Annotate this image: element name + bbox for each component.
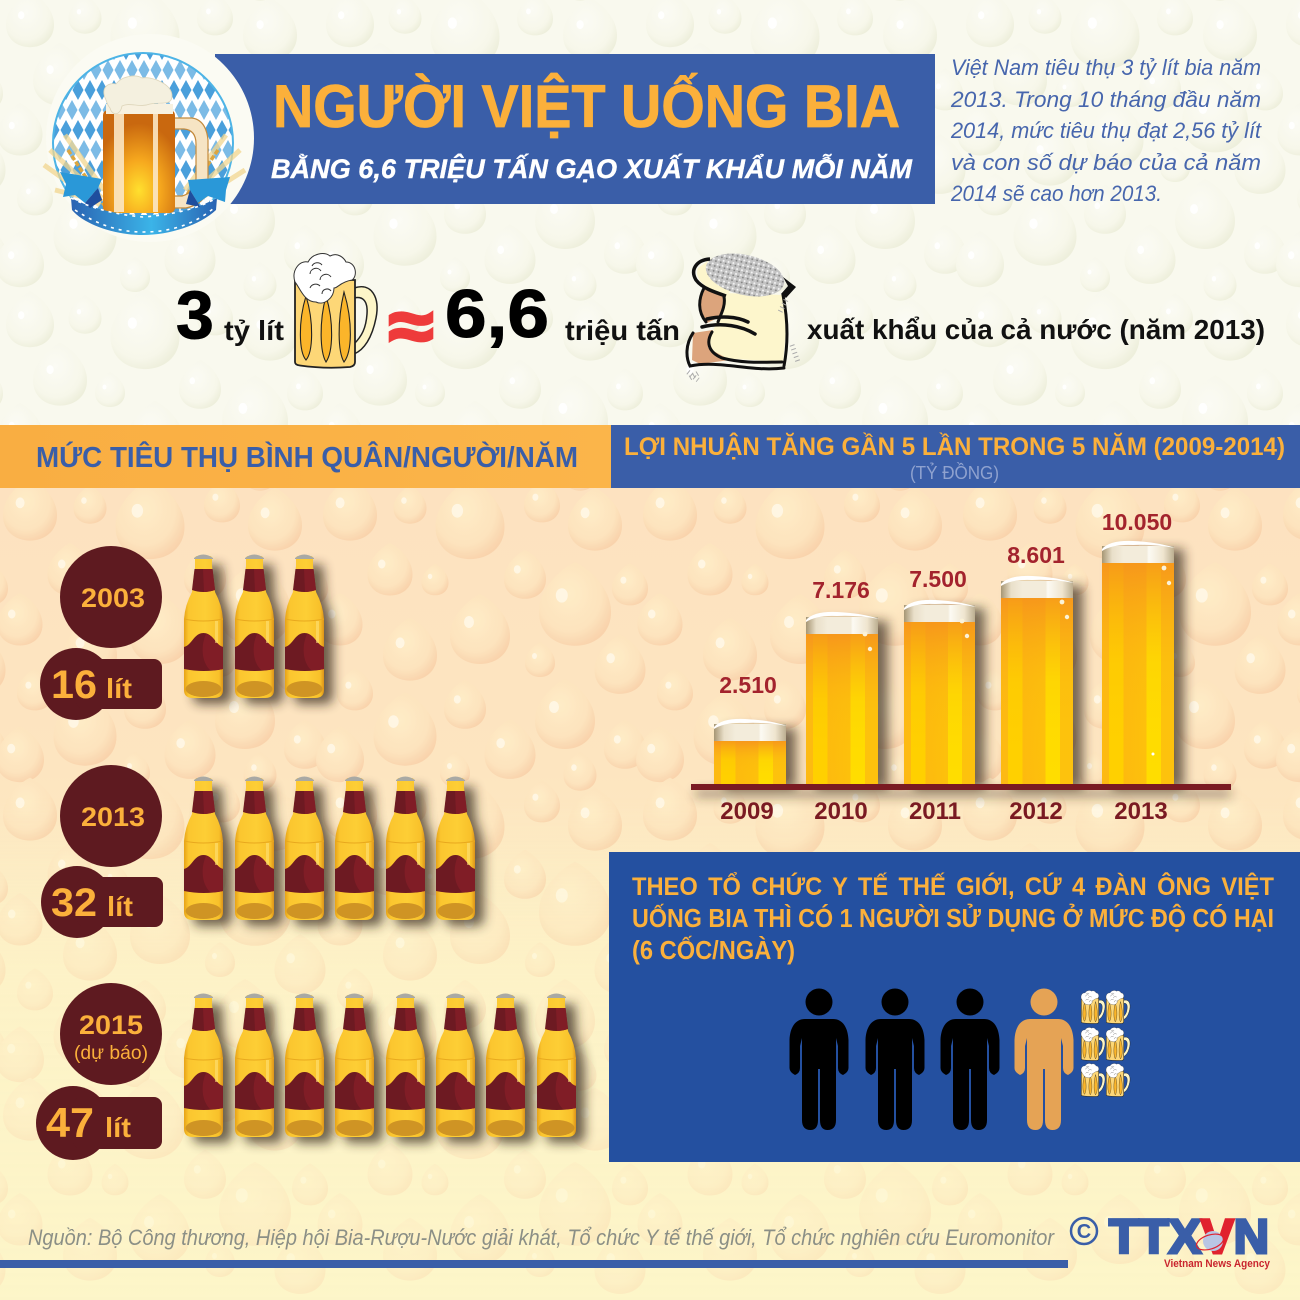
bar 2009 [714, 719, 787, 784]
intro paragraph: 2014 sẽ cao hơn 2013. [950, 181, 1162, 206]
row: 2003 consumption [40, 546, 333, 720]
value badge 32 lít [41, 866, 163, 938]
panel: WHO warning [609, 852, 1300, 1162]
bar value labels: 8.601 [1007, 542, 1065, 568]
header: profit [611, 425, 1300, 488]
header: profit: (TỶ ĐỒNG) [910, 462, 999, 483]
warning text: (6 CỐC/NGÀY) [632, 935, 795, 965]
bar 2012 [1001, 576, 1074, 784]
header: per capita [0, 425, 611, 488]
value badge 16 lít [40, 648, 162, 720]
bar 2011 [904, 600, 976, 784]
bar value labels: 2.510 [719, 672, 777, 698]
title banner [46, 34, 935, 242]
warning text [632, 871, 1274, 965]
bottles: 6 [184, 776, 484, 926]
people: three men in black [790, 988, 1000, 1130]
icon: rice sack [687, 247, 798, 380]
header: profit: LỢI NHUẬN TĂNG GẦN 5 LẦN TRONG 5 NĂM (2009-2014) [624, 431, 1285, 461]
value badge 47 lít: 47 [46, 1099, 94, 1146]
year badge 2013 [60, 765, 162, 867]
caption: national export: xuất khẩu của cả nước (năm 2013) [807, 314, 1265, 345]
value badge 47 lít [36, 1086, 162, 1160]
year axis labels: 2011 [909, 798, 961, 825]
background top [0, 0, 1300, 425]
value badge 32 lít: lít [107, 891, 133, 922]
value: 3 billion litres: 3 [176, 277, 214, 353]
bar 2013 [1102, 541, 1175, 784]
year axis labels: 2010 [814, 798, 868, 825]
year axis labels: 2012 [1009, 798, 1063, 825]
year axis labels [720, 798, 1168, 825]
value badge 16 lít: lít [106, 673, 132, 704]
intro paragraph: 2013. Trong 10 tháng đầu năm [950, 87, 1261, 112]
header: per capita: MỨC TIÊU THỤ BÌNH QUÂN/NGƯỜI/NĂM [36, 440, 578, 474]
year axis labels: 2009 [720, 798, 774, 825]
value badge 32 lít: 32 [51, 881, 97, 925]
intro paragraph [950, 55, 1262, 206]
bar value labels: 7.176 [812, 577, 870, 603]
chart axis [691, 784, 1231, 790]
value badge 16 lít: 16 [51, 663, 97, 707]
year badge 2015: 2015 [79, 1010, 143, 1040]
unit: triệu tấn: triệu tấn [565, 315, 680, 346]
logo: TTXVN: TTXVN [1109, 1211, 1269, 1264]
year axis labels: 2013 [1114, 798, 1168, 825]
value: 6,6: 6,6 [445, 276, 549, 352]
row: 2015 forecast consumption [36, 983, 585, 1160]
person: harmful drinker [1014, 988, 1074, 1130]
six mugs [1081, 990, 1130, 1097]
year badge 2003: 2003 [81, 583, 145, 613]
footer rule [0, 1260, 1068, 1268]
value badge 47 lít: lít [105, 1112, 131, 1143]
bar value labels: 7.500 [909, 566, 967, 592]
unit: tỷ lít: tỷ lít [224, 315, 284, 346]
equation row [176, 247, 1265, 380]
bottles: 3 [184, 554, 333, 704]
subtitle: BẰNG 6,6 TRIỆU TẤN GẠO XUẤT KHẨU MỖI NĂM [271, 153, 913, 184]
row: 2013 consumption [41, 765, 484, 938]
intro paragraph: và con số dự báo của cả năm [951, 150, 1261, 175]
bar value labels: 10.050 [1102, 509, 1172, 535]
year badge 2015 [60, 983, 162, 1085]
logo: beer mug emblem [44, 53, 245, 235]
bar 2010 [806, 612, 879, 784]
intro paragraph: Việt Nam tiêu thụ 3 tỷ lít bia năm [951, 55, 1261, 80]
warning text: THEO TỔ CHỨC Y TẾ THẾ GIỚI, CỨ 4 ĐÀN ÔNG VIỆT [632, 871, 1274, 901]
source note: Nguồn: Bộ Công thương, Hiệp hội Bia-Rượu-Nước giải khát, Tổ chức Y tế thế giới, Tổ chức nghiên cứu Euromonitor [28, 1225, 1056, 1250]
main title: NGƯỜI VIỆT UỐNG BIA [273, 73, 900, 140]
logo: TTXVN: C [1077, 1221, 1091, 1243]
year badge 2015: (dự báo) [74, 1043, 148, 1064]
year badge 2003 [60, 546, 162, 648]
intro paragraph: 2014, mức tiêu thụ đạt 2,56 tỷ lít [950, 118, 1262, 143]
logo: TTXVN: Vietnam News Agency [1164, 1258, 1271, 1270]
background bottom [0, 488, 1300, 1300]
bar chart: profit [691, 509, 1231, 825]
icon: beer mug [294, 254, 377, 368]
year badge 2013: 2013 [81, 802, 145, 832]
bottles: 8 [184, 994, 585, 1143]
bar value labels [719, 509, 1172, 698]
approximately sign: ≈ [389, 287, 433, 365]
